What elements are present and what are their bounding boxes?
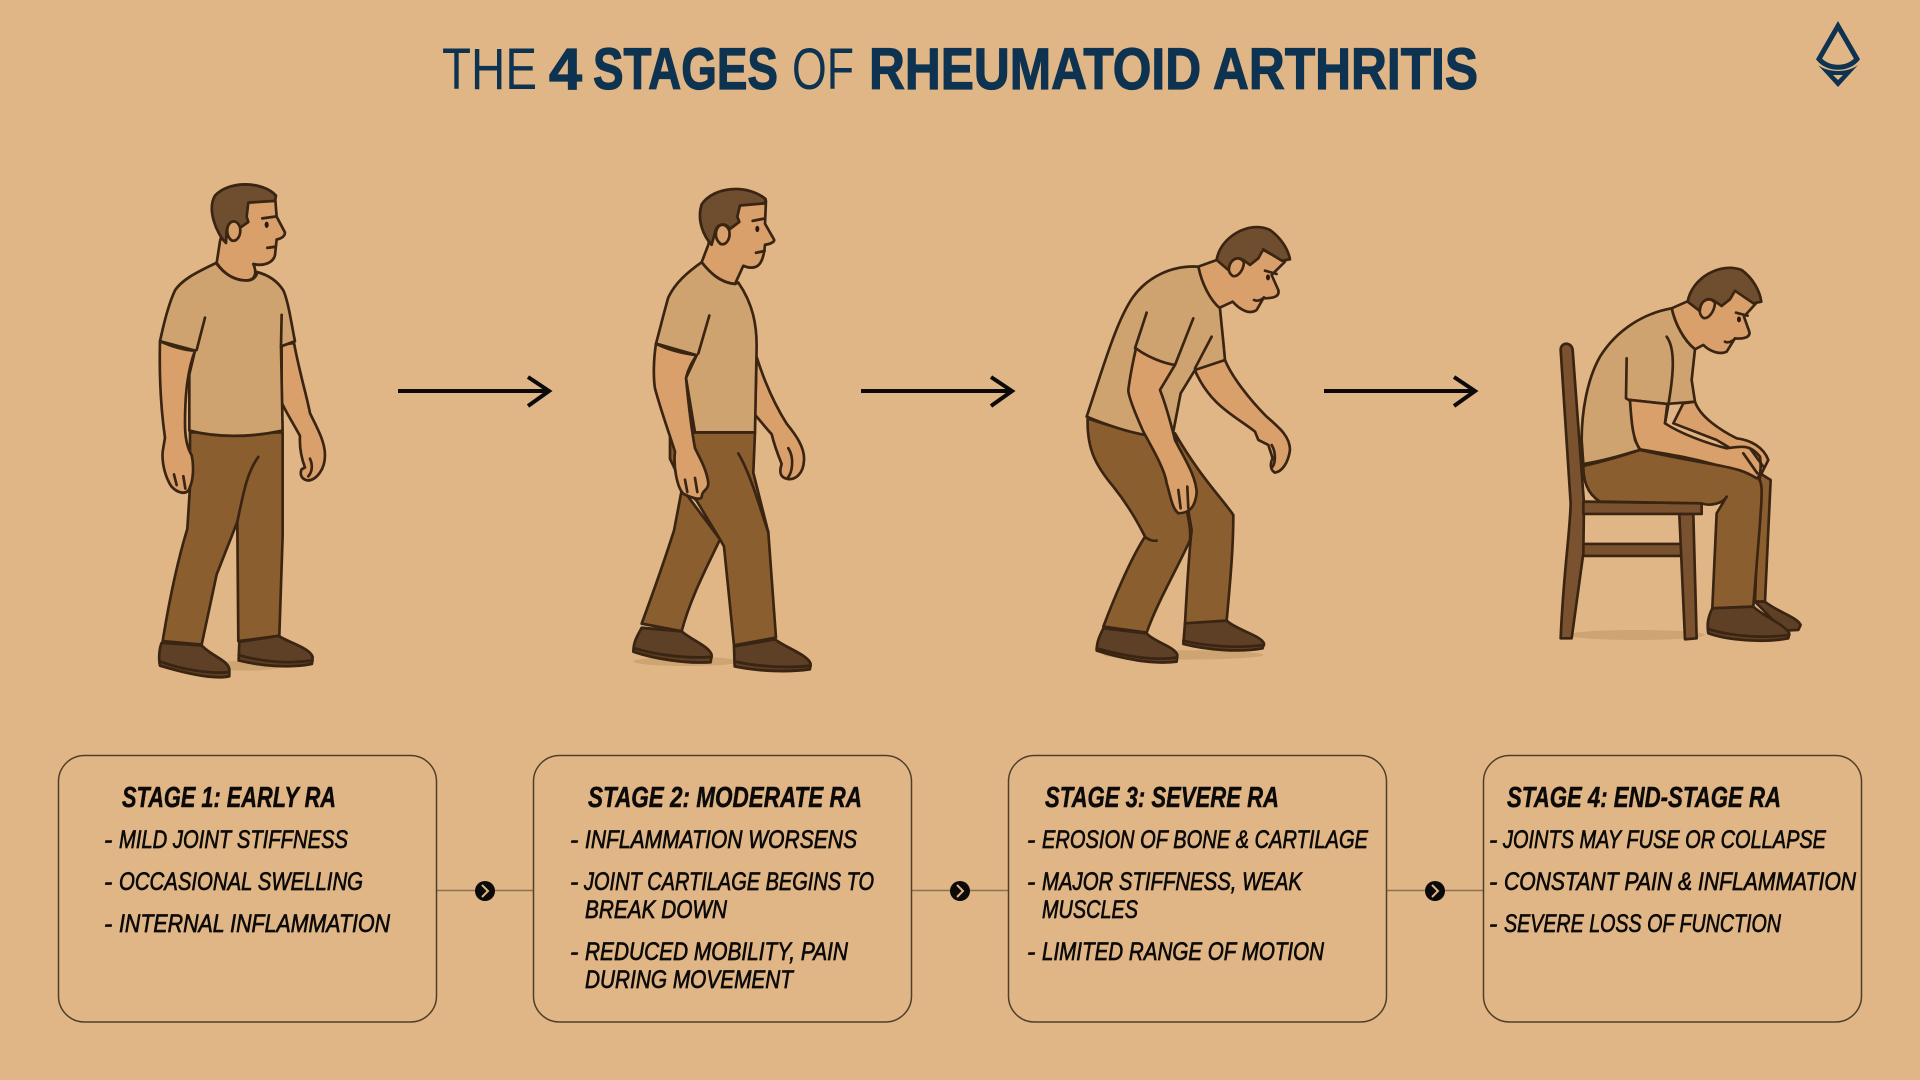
figure: stage 3 stooped man	[1087, 227, 1290, 663]
panel: stage 4: -	[1489, 910, 1497, 938]
panel: stage 1: STAGE 1: EARLY RA	[122, 782, 336, 814]
panel: stage 2: JOINT CARTILAGE BEGINS TO	[583, 868, 874, 896]
figure: stage 4 seated man	[1561, 268, 1801, 641]
panel: stage 2: INFLAMMATION WORSENS	[585, 826, 857, 854]
panel: stage 3: STAGE 3: SEVERE RA	[1045, 782, 1279, 814]
panel: stage 2: DURING MOVEMENT	[585, 966, 794, 994]
title: THE	[442, 37, 537, 102]
title	[442, 37, 1478, 102]
title: RHEUMATOID ARTHRITIS	[869, 37, 1478, 102]
arrow: stage 3 to 4	[1324, 377, 1475, 406]
panel: stage 3: -	[1027, 868, 1035, 896]
icon: logo	[1818, 26, 1858, 87]
panel: stage 3: MUSCLES	[1042, 896, 1138, 924]
panel: stage 4: -	[1489, 868, 1497, 896]
panel: stage 2: BREAK DOWN	[585, 896, 728, 924]
panel: stage 4: STAGE 4: END-STAGE RA	[1507, 782, 1781, 814]
panel: stage 2: STAGE 2: MODERATE RA	[588, 782, 862, 814]
arrow: stage 1 to 2	[398, 377, 549, 406]
figure: stage 2 walking man	[633, 189, 811, 671]
panel: stage 3: -	[1027, 938, 1035, 966]
panel: stage 4: JOINTS MAY FUSE OR COLLAPSE	[1502, 826, 1826, 854]
panel: stage 2: -	[570, 826, 578, 854]
connector: stage 2 to 3	[911, 881, 1009, 901]
panel: stage 3	[1008, 756, 1386, 1022]
panel: stage 4: CONSTANT PAIN & INFLAMMATION	[1504, 868, 1857, 896]
figure: stage 1 standing man	[159, 184, 325, 677]
panel: stage 1	[58, 756, 436, 1022]
panel: stage 4	[1484, 756, 1862, 1022]
connector: stage 1 to 2	[436, 881, 534, 901]
panel: stage 3: MAJOR STIFFNESS, WEAK	[1042, 868, 1303, 896]
panel: stage 1: INTERNAL INFLAMMATION	[119, 910, 391, 938]
title: 4	[549, 37, 582, 102]
panel: stage 1: MILD JOINT STIFFNESS	[119, 826, 348, 854]
arrow: stage 2 to 3	[861, 377, 1012, 406]
panel: stage 3: LIMITED RANGE OF MOTION	[1042, 938, 1325, 966]
panel: stage 1: OCCASIONAL SWELLING	[119, 868, 363, 896]
panel: stage 2	[534, 756, 912, 1022]
panel: stage 2: -	[570, 938, 578, 966]
panel: stage 3: EROSION OF BONE & CARTILAGE	[1042, 826, 1368, 854]
title: OF	[792, 37, 854, 102]
panel: stage 4: -	[1489, 826, 1497, 854]
panel: stage 1: -	[104, 868, 112, 896]
panel: stage 1: -	[104, 826, 112, 854]
connector: stage 3 to 4	[1386, 881, 1484, 901]
panel: stage 3: -	[1027, 826, 1035, 854]
panel: stage 4: SEVERE LOSS OF FUNCTION	[1504, 910, 1782, 938]
title: STAGES	[593, 37, 778, 102]
panel: stage 1: -	[104, 910, 112, 938]
panel: stage 2: -	[570, 868, 578, 896]
panel: stage 2: REDUCED MOBILITY, PAIN	[585, 938, 849, 966]
